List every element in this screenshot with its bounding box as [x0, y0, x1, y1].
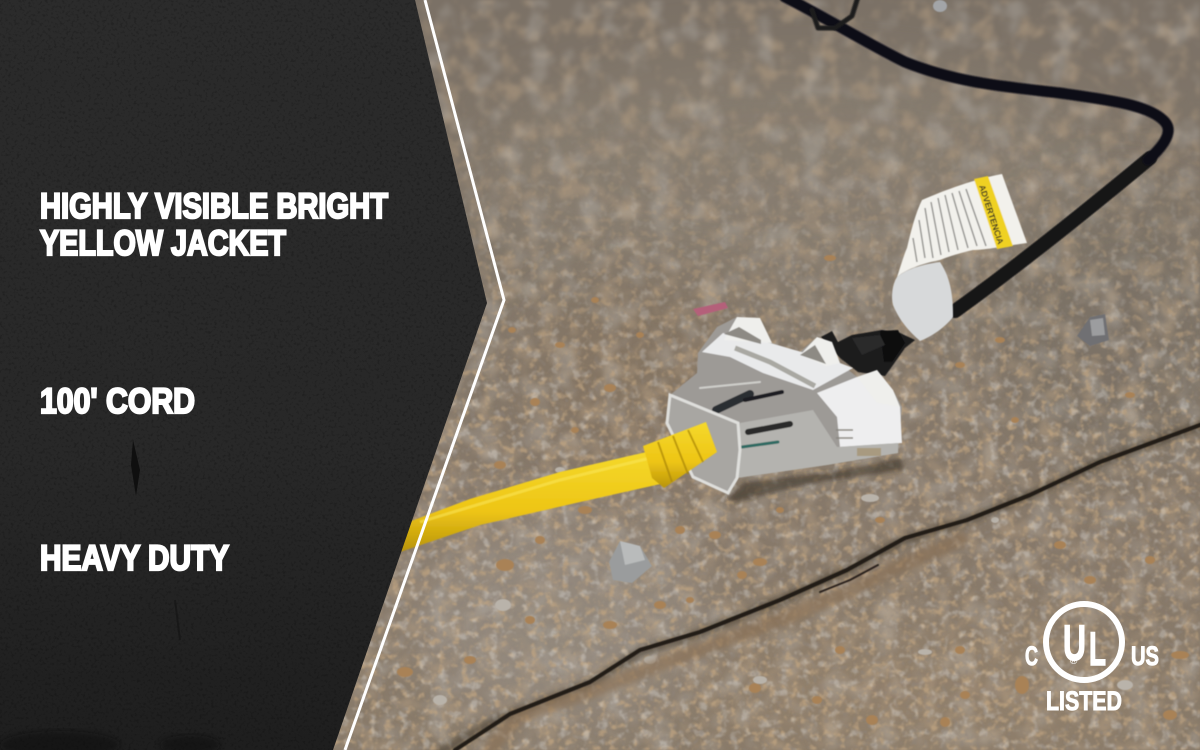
- tag: blank fold: [892, 262, 953, 341]
- tag: warning heading: ADVERTENCIA: [977, 184, 1006, 246]
- feature: 100' cord: 100' CORD: [40, 382, 195, 421]
- plug: front collar: [667, 395, 740, 493]
- stone: rear: [1077, 314, 1109, 346]
- debris: pink fragment: [693, 302, 728, 316]
- icon: UL listed certification mark: C: [1025, 641, 1038, 671]
- plug: right outlet face: [817, 377, 902, 447]
- clear three-outlet plug: [667, 317, 905, 502]
- black plug: [821, 330, 915, 376]
- icon: UL listed certification mark: ®: [1070, 656, 1078, 667]
- plug: top ground prongs: [724, 317, 900, 407]
- tag: fine print lines: [913, 189, 986, 262]
- heading: highly visible bright yellow jacket: HIGHLY VISIBLE BRIGHT: [40, 187, 388, 226]
- debris: pale stone at top: [933, 0, 947, 12]
- plug: lower clear section: [737, 410, 898, 478]
- plug: outlet slots: [836, 430, 853, 438]
- icon: UL listed certification mark: LISTED: [1046, 686, 1122, 716]
- pale aggregate flecks: [433, 467, 1133, 705]
- tag: printed face: [897, 174, 1027, 277]
- stone: front: [609, 541, 652, 583]
- icon: UL listed certification mark: [1025, 604, 1159, 716]
- scattered pebbles: [397, 255, 1189, 727]
- plug: lower amber detail: [857, 448, 881, 456]
- tag: yellow warning strip: [974, 176, 1013, 249]
- warning tag: [892, 174, 1027, 341]
- plug: engraved band detail: [735, 348, 815, 386]
- plug: shadow: [690, 458, 905, 502]
- plug: clear body: [667, 317, 902, 493]
- plug: dark interior wiring: [700, 382, 790, 447]
- heading: highly visible bright yellow jacket: [40, 187, 388, 263]
- icon: UL listed certification mark: L: [1089, 622, 1106, 675]
- icon: UL listed certification mark: US: [1131, 641, 1159, 671]
- gravel stones: [609, 0, 1109, 583]
- plug: prong shading: [724, 327, 826, 364]
- photo background: concrete ground: [334, 0, 1200, 750]
- concrete crack: [440, 425, 1200, 750]
- plug: white top band: [702, 333, 853, 390]
- feature: heavy duty: HEAVY DUTY: [40, 539, 229, 578]
- heading: highly visible bright yellow jacket: YELLOW JACKET: [40, 224, 286, 263]
- yellow extension cord: [398, 422, 717, 552]
- black power cord: [785, 0, 1168, 311]
- icon: UL listed certification mark: U: [1063, 615, 1086, 671]
- cord strain relief collar: [643, 422, 717, 488]
- white chevron outline: [345, 0, 504, 750]
- panel: dark feature panel: [0, 0, 504, 750]
